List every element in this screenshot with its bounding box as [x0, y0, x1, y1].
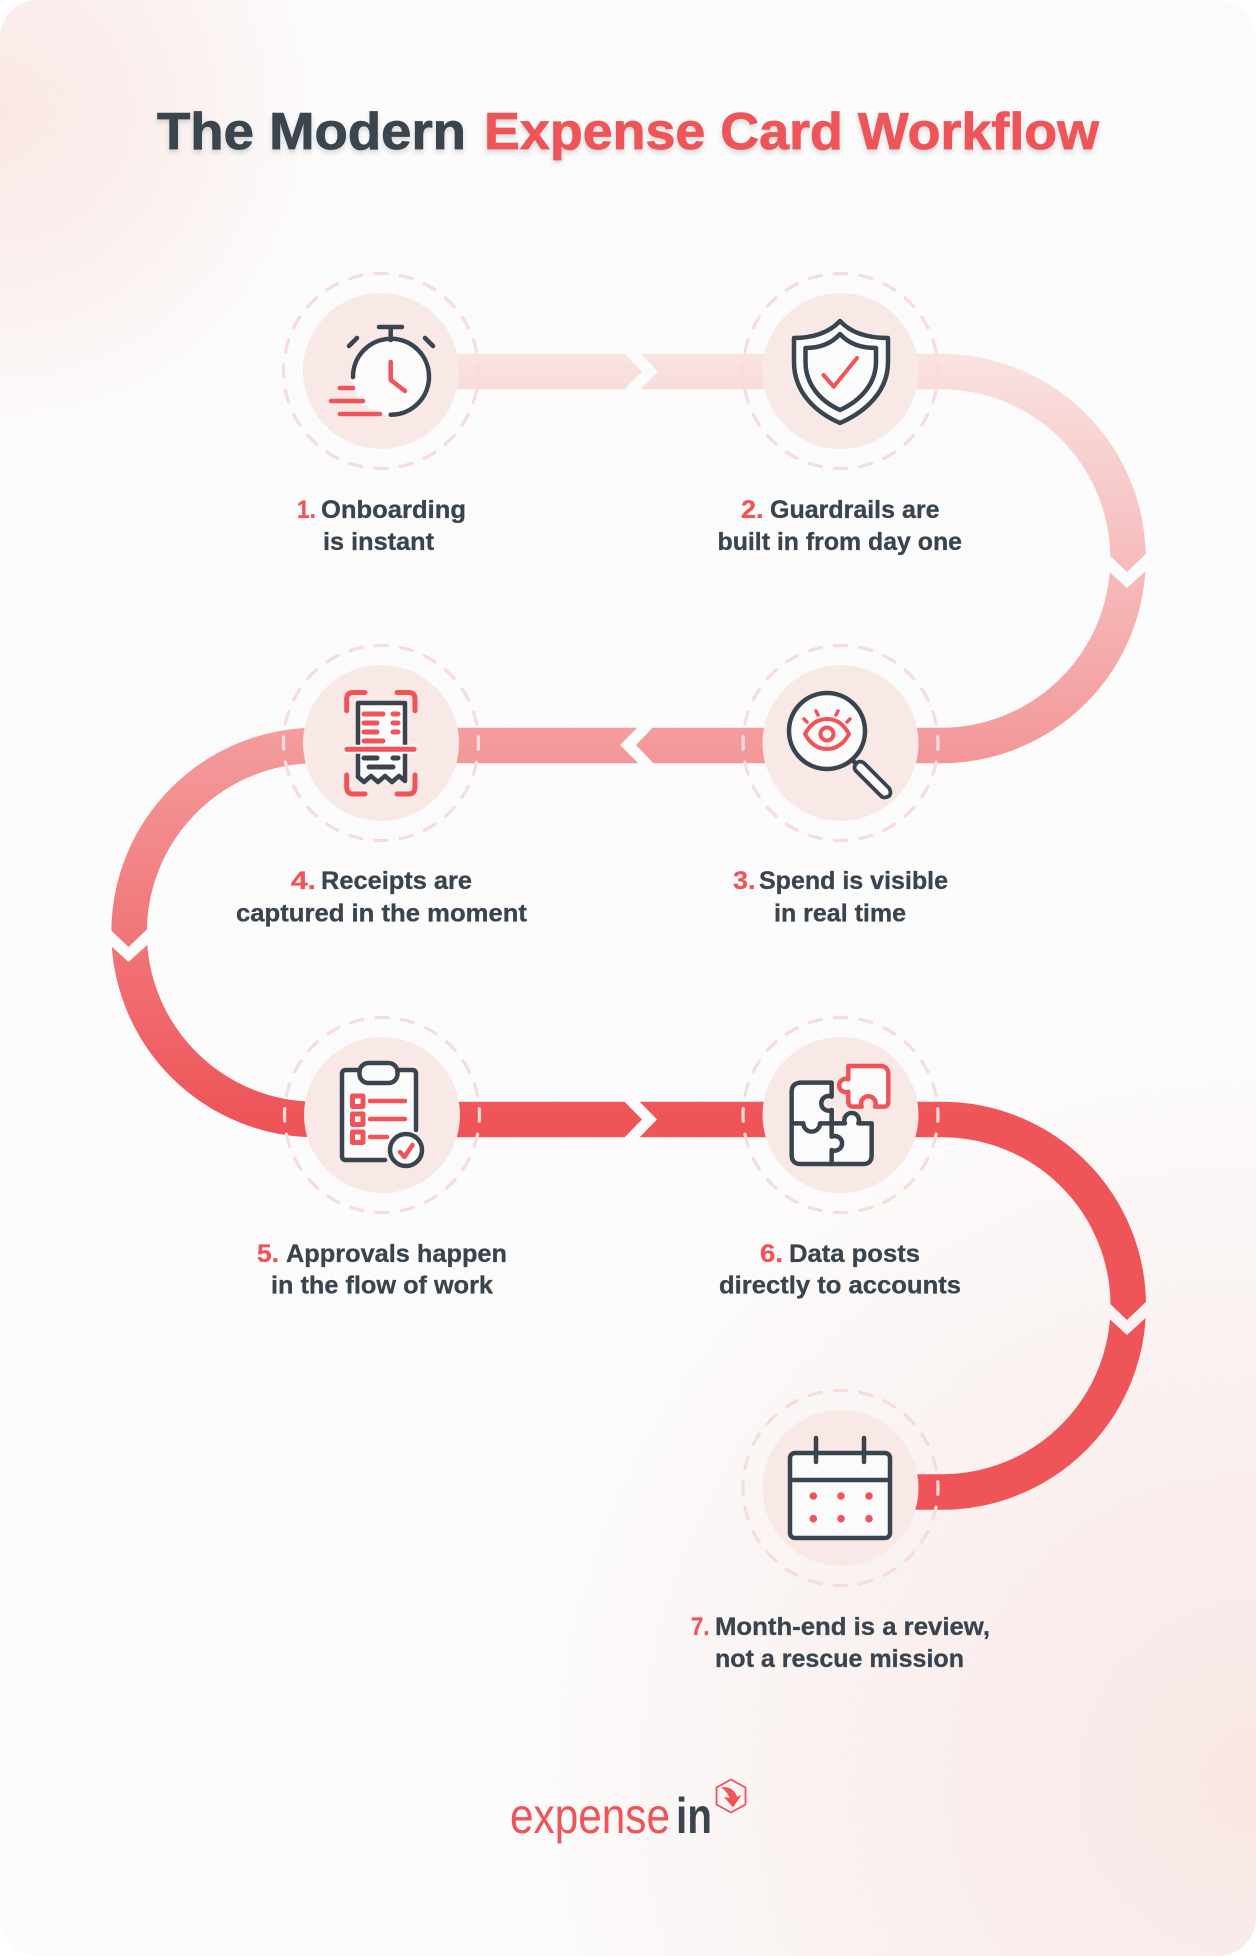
label 5: Approvals happen	[286, 1240, 507, 1268]
label 6: directly to accounts	[719, 1272, 961, 1300]
label 6: 6.	[760, 1240, 783, 1268]
label 3: in real time	[774, 900, 906, 928]
disc 7	[762, 1410, 918, 1566]
label 5	[257, 1240, 507, 1300]
icon: calendar	[790, 1438, 890, 1538]
logo mark: hexagon arrow	[716, 1780, 746, 1812]
logo: expensein: in	[676, 1788, 712, 1844]
label 5: 5.	[257, 1240, 279, 1268]
label 1	[297, 496, 466, 556]
disc 3	[762, 665, 918, 821]
disc 5	[304, 1037, 460, 1193]
label 4: captured in the moment	[236, 900, 528, 928]
logo: expensein: expense	[510, 1788, 670, 1844]
icon: magnifier with eye	[789, 693, 890, 798]
disc 4	[303, 665, 459, 821]
step 3: spend visible	[733, 646, 948, 928]
label 1: Onboarding	[321, 496, 466, 524]
label 7: not a rescue mission	[715, 1645, 964, 1673]
title: Expense Card Workflow	[484, 103, 1100, 161]
dashed ring 1	[284, 274, 478, 468]
step 5: approvals	[257, 1018, 507, 1300]
logo: expensein	[510, 1780, 746, 1844]
dashed ring 7	[743, 1390, 938, 1586]
disc 1	[303, 293, 459, 449]
label 7: Month-end is a review,	[715, 1613, 990, 1641]
dashed ring 2	[743, 274, 938, 468]
step 4: receipts	[236, 646, 528, 928]
label 4: Receipts are	[321, 867, 472, 895]
label 3	[733, 867, 948, 928]
label 1: 1.	[297, 496, 316, 524]
disc 2	[762, 293, 918, 449]
label 4: 4.	[291, 867, 316, 895]
label 2: Guardrails are	[770, 496, 940, 524]
dashed ring 5	[284, 1018, 480, 1212]
disc 6	[762, 1037, 918, 1193]
icon: puzzle	[792, 1066, 888, 1164]
label 5: in the flow of work	[271, 1272, 493, 1300]
label 6: Data posts	[789, 1240, 920, 1268]
label 4	[236, 867, 528, 928]
icon: shield	[794, 321, 888, 423]
step 1: onboarding	[284, 274, 478, 556]
step 7: month-end	[691, 1390, 990, 1673]
icon: clipboard with check	[342, 1063, 422, 1166]
dashed ring 3	[743, 646, 938, 840]
label 3: 3.	[733, 867, 756, 895]
label 2: built in from day one	[718, 528, 962, 556]
label 2: 2.	[741, 496, 764, 524]
winding flow path with chevrons	[129, 372, 1128, 1492]
dashed ring 4	[284, 646, 478, 840]
label 1: is instant	[323, 528, 435, 556]
icon: receipt scan	[345, 692, 416, 794]
label 2	[718, 496, 962, 556]
step 6: data posts	[719, 1018, 961, 1300]
step 2: guardrails	[718, 274, 962, 556]
dashed ring 6	[743, 1018, 938, 1212]
label 3: Spend is visible	[759, 867, 948, 895]
title: The Modern	[157, 103, 466, 161]
title	[157, 103, 1100, 161]
icon: stopwatch	[331, 327, 433, 415]
label 7	[691, 1613, 990, 1673]
label 7: 7.	[691, 1613, 710, 1641]
label 6	[719, 1240, 961, 1300]
